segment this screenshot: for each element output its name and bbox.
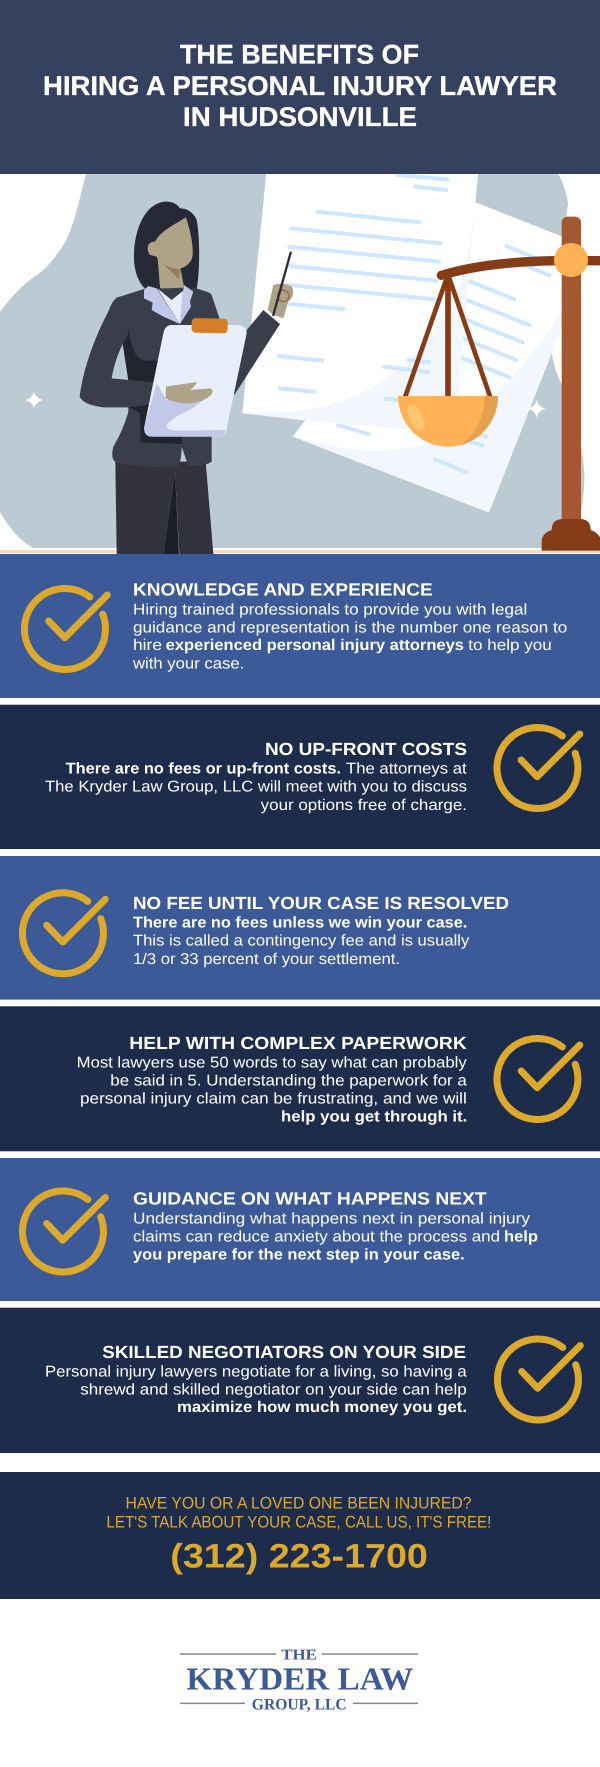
body text: Understanding what happens next in personal injury xyxy=(133,1210,530,1227)
body text xyxy=(77,1055,467,1126)
body text: This is called a contingency fee and is usually xyxy=(133,933,470,950)
icon: sparkle left xyxy=(25,391,43,409)
body text: Personal injury lawyers negotiate for a living, so having a xyxy=(45,1363,467,1380)
call to action text: LET'S TALK ABOUT YOUR CASE, CALL US, IT'S FREE! xyxy=(106,1513,491,1532)
header banner xyxy=(0,0,600,174)
body text: help you get through it. xyxy=(281,1109,467,1126)
heading: NO UP-FRONT COSTS xyxy=(265,739,467,759)
body text: be said in 5. Understanding the paperwork for a xyxy=(110,1073,467,1090)
body text: Hiring trained professionals to provide you with legal xyxy=(133,601,527,618)
icon: lawyer woman with clipboard xyxy=(80,202,293,554)
body text: you prepare for the next step in your case. xyxy=(133,1246,465,1263)
pointer hand xyxy=(268,284,293,318)
heading: NO FEE UNTIL YOUR CASE IS RESOLVED xyxy=(133,893,509,913)
title: THE BENEFITS OF xyxy=(180,40,419,70)
panel: guidance on what happens next xyxy=(0,1158,600,1301)
holding hand xyxy=(166,382,212,403)
body text xyxy=(45,1363,467,1416)
body text: There are no fees or up-front costs. xyxy=(66,760,341,777)
body text: Most lawyers use 50 words to say what can probably xyxy=(77,1055,467,1072)
body text: your options free of charge. xyxy=(261,797,467,814)
body text: 1/3 or 33 percent of your settlement. xyxy=(133,951,400,968)
documents xyxy=(242,170,567,513)
body text xyxy=(133,1210,538,1263)
clipboard xyxy=(144,325,247,437)
panel: no up-front costs xyxy=(0,705,600,849)
icon: gold check circle xyxy=(24,588,107,669)
icon: sparkle right xyxy=(528,400,546,418)
body text: maximize how much money you get. xyxy=(177,1399,467,1416)
heading: KNOWLEDGE AND EXPERIENCE xyxy=(133,580,433,600)
icon: scales of justice xyxy=(398,217,600,551)
logo: The Kryder Law Group, LLC: KRYDER LAW xyxy=(186,1660,413,1696)
icon: gold check circle xyxy=(22,893,105,974)
body text: help xyxy=(504,1228,538,1245)
body text: The attorneys at xyxy=(346,760,467,777)
heading: SKILLED NEGOTIATORS ON YOUR SIDE xyxy=(102,1342,466,1362)
body text: There are no fees unless we win your case. xyxy=(133,915,467,932)
peach floor line xyxy=(0,550,600,553)
panel: hero illustration xyxy=(0,170,600,554)
body text: to help you xyxy=(468,637,552,654)
phone number: (312) 223-1700 xyxy=(170,1538,428,1576)
panel: call to action xyxy=(0,1472,600,1599)
heading: HELP WITH COMPLEX PAPERWORK xyxy=(129,1033,467,1053)
logo: The Kryder Law Group, LLC xyxy=(180,1647,418,1713)
panel: knowledge and experience xyxy=(0,554,600,698)
title xyxy=(43,40,557,132)
hair xyxy=(134,202,199,289)
title: HIRING A PERSONAL INJURY LAWYER xyxy=(43,71,557,101)
call to action text: HAVE YOU OR A LOVED ONE BEEN INJURED? xyxy=(126,1494,472,1513)
panel: no fee until your case is resolved xyxy=(0,856,600,1000)
body text: personal injury claim can be frustrating, and we will xyxy=(80,1091,467,1108)
body text: guidance and representation is the number one reason to xyxy=(133,619,568,636)
body text: with your case. xyxy=(132,655,244,672)
icon: gold check circle xyxy=(497,1339,580,1420)
shirt and collar xyxy=(157,288,183,324)
trousers xyxy=(115,462,213,554)
body text: claims can reduce anxiety about the process and xyxy=(133,1228,500,1245)
icon: gold check circle xyxy=(22,1191,105,1272)
neck and face xyxy=(157,255,184,301)
call to action text xyxy=(106,1494,491,1532)
body text xyxy=(45,760,467,814)
background blob xyxy=(0,174,584,548)
body text: hire xyxy=(133,637,162,654)
body text xyxy=(132,601,568,672)
icon: gold check circle xyxy=(497,1038,580,1119)
jacket xyxy=(108,287,220,467)
heading: GUIDANCE ON WHAT HAPPENS NEXT xyxy=(133,1189,487,1209)
logo: The Kryder Law Group, LLC: GROUP, LLC xyxy=(252,1696,347,1713)
panel: skilled negotiators on your side xyxy=(0,1308,600,1453)
body text: experienced personal injury attorneys xyxy=(166,637,464,654)
body text: The Kryder Law Group, LLC will meet with you to discuss xyxy=(45,779,467,796)
logo: The Kryder Law Group, LLC: THE xyxy=(281,1647,317,1663)
body text: shrewd and skilled negotiator on your side can help xyxy=(80,1381,467,1398)
icon: gold check circle xyxy=(497,727,580,808)
title: IN HUDSONVILLE xyxy=(183,102,417,132)
body text xyxy=(133,915,470,968)
panel: help with complex paperwork xyxy=(0,1006,600,1151)
